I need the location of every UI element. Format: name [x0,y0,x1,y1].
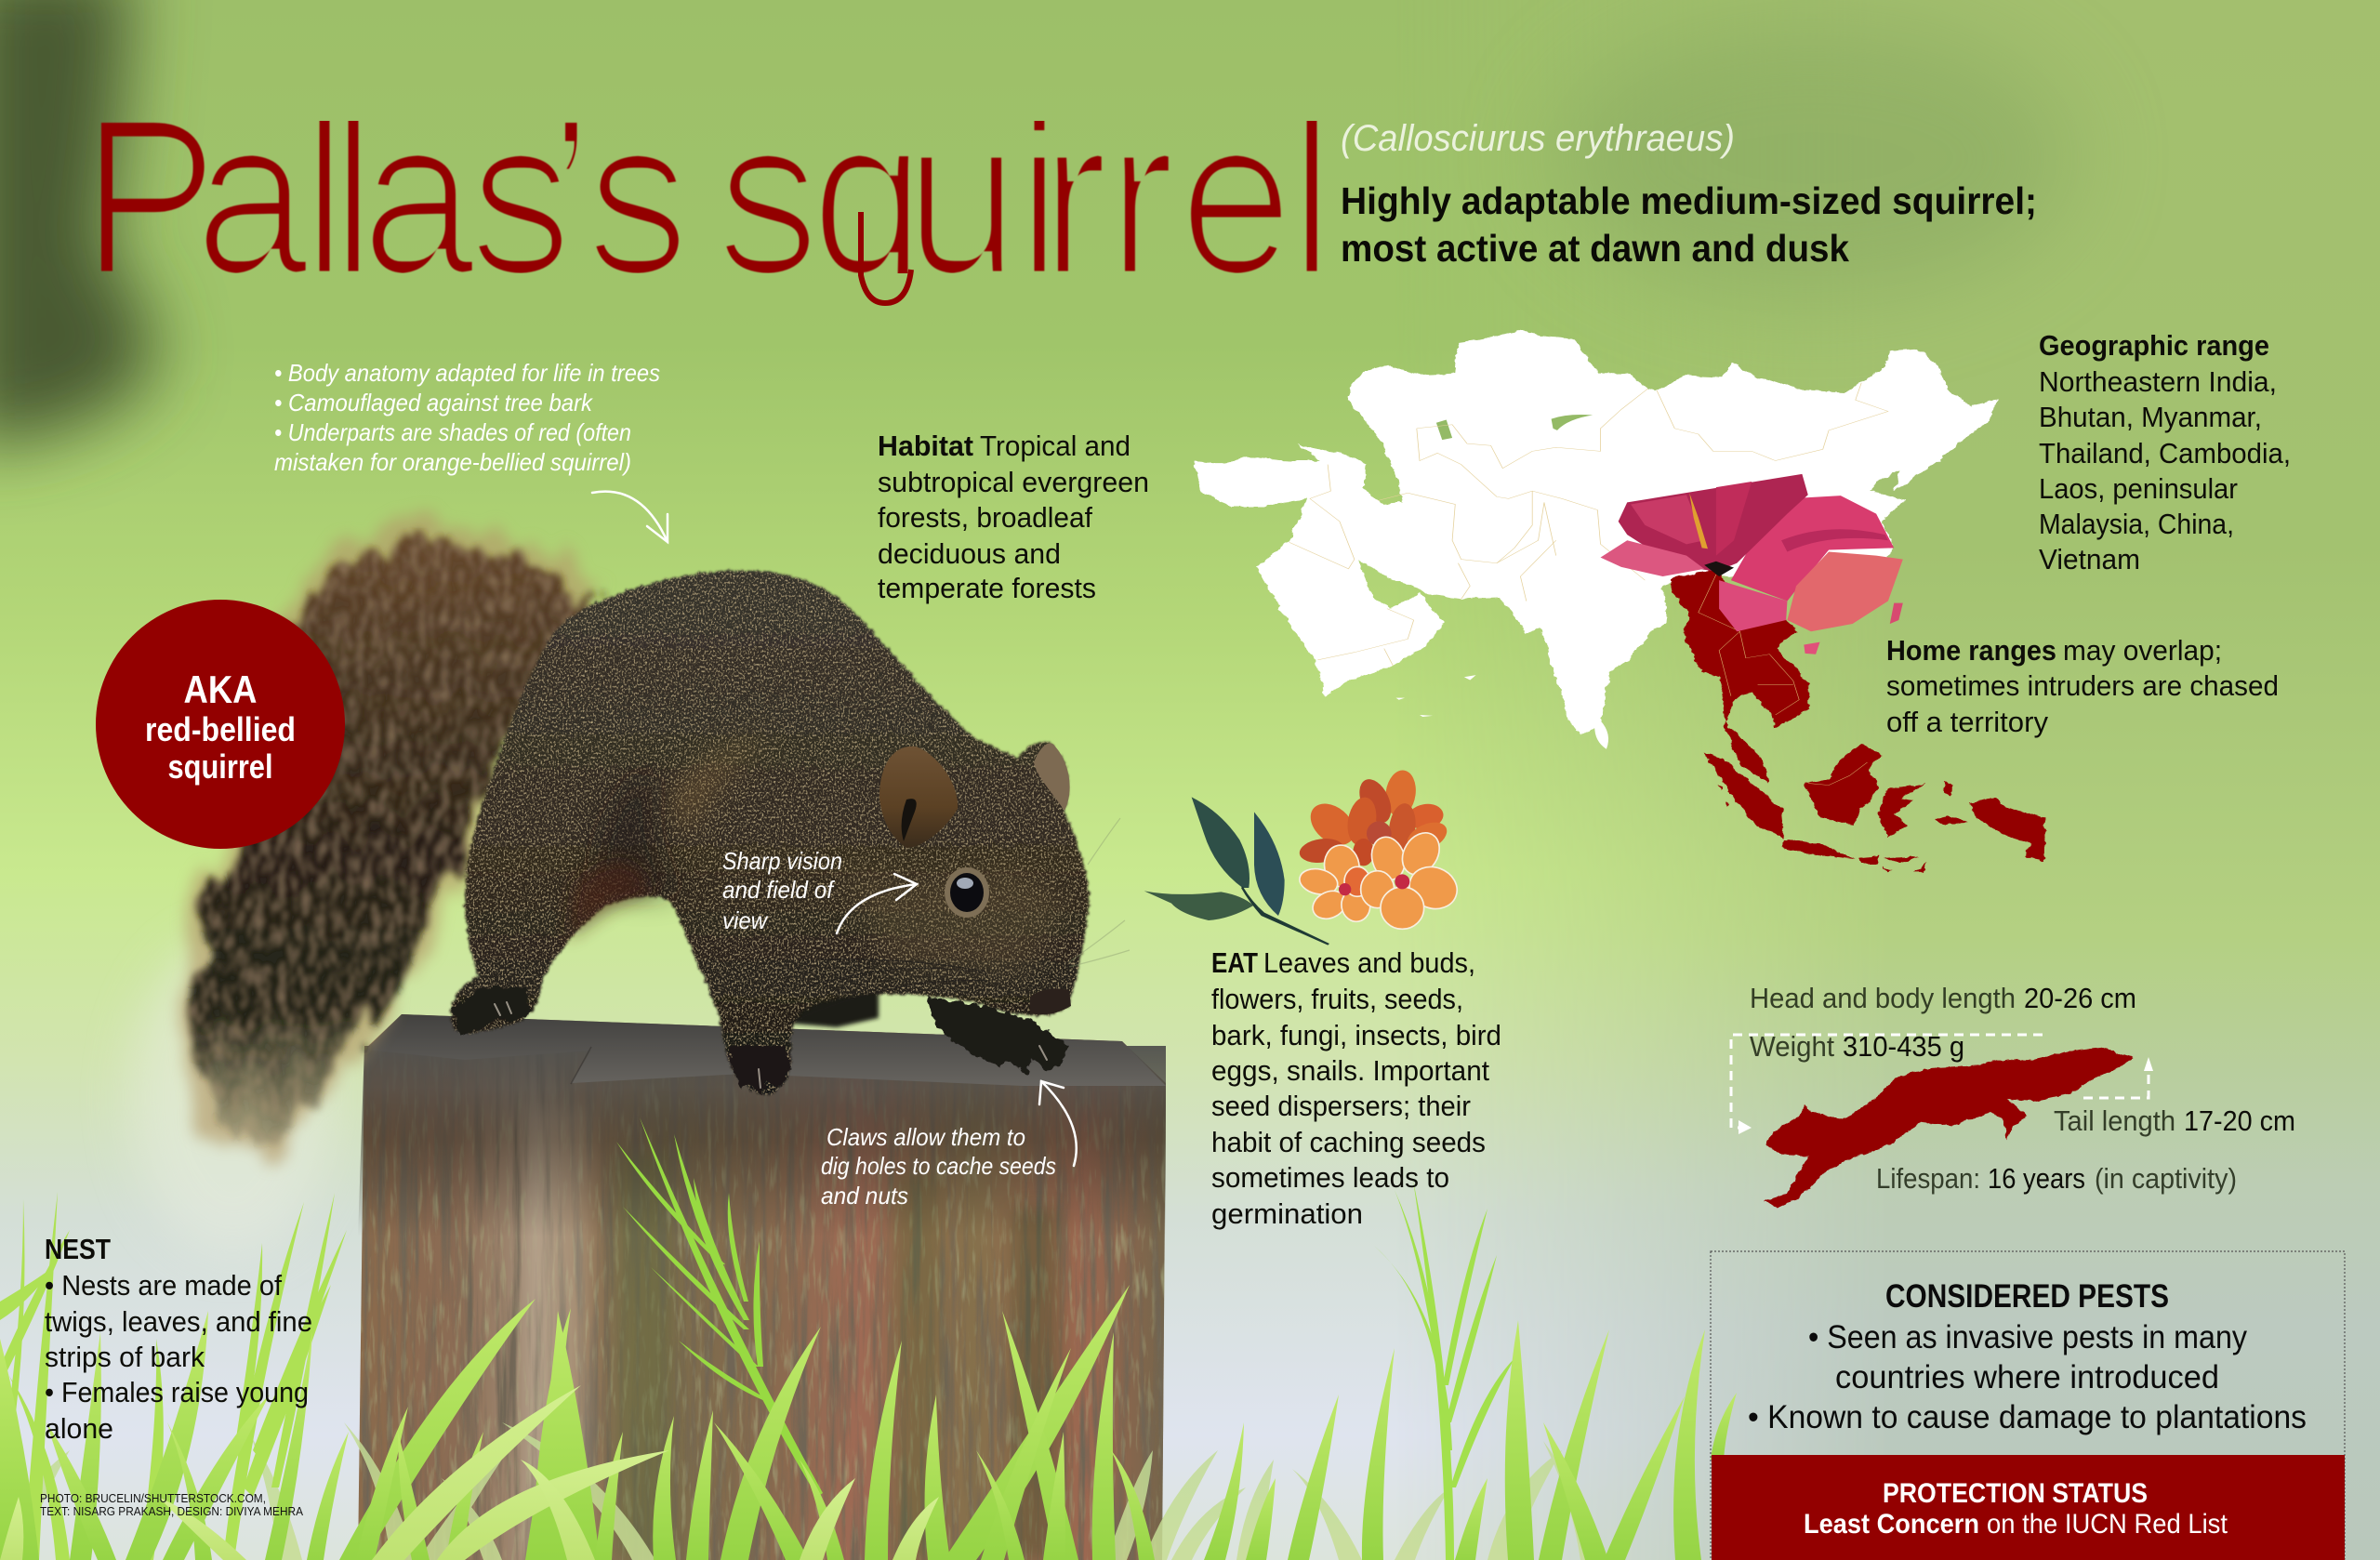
trait notes: • Underparts are shades of red (often [274,418,631,446]
icon: flowers front [1297,826,1463,929]
diet text: flowers, fruits, seeds, [1211,983,1463,1015]
hind paw [452,987,532,1034]
home ranges text: sometimes intruders are chased [1886,669,2279,702]
credits: TEXT: NISARG PRAKASH, DESIGN: DIVIYA MEHRA [40,1504,303,1518]
panel: considered pests: • Known to cause damage to plantations [1748,1399,2307,1435]
arrow: vision [837,874,917,933]
whiskers [790,818,1130,1023]
AKA badge: AKA [184,668,257,711]
tall plant centre [616,1117,823,1497]
nest text: • Females raise young [45,1376,309,1408]
near front paw [926,997,1069,1074]
vision note [722,847,842,934]
range map [1195,330,2045,872]
squirrel photo [177,519,1130,1153]
habitat text: temperate forests [878,572,1096,604]
subtitle [1341,179,2037,270]
habitat text: forests, broadleaf [878,501,1092,534]
diet text: germination [1211,1197,1363,1230]
map: red region borders [1699,575,1868,786]
home ranges text [1886,634,2279,738]
left plants [0,1192,347,1560]
diet text: EAT [1211,946,1258,979]
tall plant right [1374,1181,1515,1560]
geographic range text: Vietnam [2039,543,2140,575]
panel: considered pests: CONSIDERED PESTS [1885,1278,2169,1315]
scientific name: (Callosciurus erythraeus) [1341,118,1735,159]
credits: PHOTO: BRUCELIN/SHUTTERSTOCK.COM, [40,1491,266,1505]
measurements: Lifespan: [1876,1162,1980,1195]
diet text: habit of caching seeds [1211,1126,1486,1158]
measurements: Head and body length [1750,982,2016,1014]
measurements: 17-20 cm [2184,1104,2295,1137]
panel: protection status: on the IUCN Red List [1987,1509,2228,1540]
measurements: 16 years [1988,1162,2085,1195]
arrow: traits to squirrel [592,492,668,542]
icon: leaves and flowers [1144,768,1463,945]
claws note: dig holes to cache seeds [821,1152,1056,1180]
geographic range text: Malaysia, China, [2039,508,2234,540]
squirrel tail [177,519,604,1153]
panel: protection status [1712,1455,2345,1560]
home ranges text: Home ranges [1886,634,2056,667]
measurements: Tail length [2054,1104,2175,1137]
right blades [1204,1320,1737,1560]
habitat text: deciduous and [878,537,1061,570]
measurements: 310-435 g [1843,1030,1964,1063]
near front claws [731,1046,790,1097]
trait notes [274,359,660,476]
arrowhead body length [1739,1120,1752,1134]
map: Sri Lanka and islands [1395,675,1608,749]
trait notes: • Body anatomy adapted for life in trees [274,359,660,387]
nose [1030,989,1071,1014]
nest text [45,1233,312,1445]
title q tail [861,212,911,303]
wooden post [358,1014,1166,1560]
home ranges text: off a territory [1886,706,2049,738]
map: inland seas [1436,415,1593,440]
trait notes: • Camouflaged against tree bark [274,389,594,416]
diet text: Leaves and buds, [1263,946,1475,979]
nest text: alone [45,1412,113,1445]
grass [0,1117,1737,1560]
diet text [1211,946,1501,1230]
panel: protection status: Least Concern [1804,1509,1979,1540]
geographic range text: Thailand, Cambodia, [2039,437,2291,469]
eye [950,873,984,912]
panel: considered pests: • Seen as invasive pests in many [1808,1319,2247,1355]
vision note: Sharp vision [722,847,842,875]
nest text: strips of bark [45,1341,205,1373]
diet text: sometimes leads to [1211,1161,1449,1194]
nest text: twigs, leaves, and fine [45,1305,312,1338]
arrowhead tail length [2144,1057,2153,1071]
nest text: NEST [45,1233,111,1265]
habitat text: Habitat [878,430,973,462]
habitat text: subtropical evergreen [878,466,1149,498]
map: squirrel range in red [1669,569,2045,872]
habitat text: Tropical and [980,430,1130,462]
icon: flowers back [1298,768,1451,866]
arrow: claws [1039,1081,1077,1166]
squirrel body [451,571,1090,1095]
dashed tail length bracket [2083,1069,2149,1098]
trait notes: mistaken for orange-bellied squirrel) [274,448,631,476]
panel: considered pests [1711,1251,2345,1559]
measurements: (in captivity) [2095,1162,2237,1195]
claws note: Claws allow them to [826,1123,1025,1151]
measurements [1750,982,2295,1195]
geographic range text: Northeastern India, [2039,365,2277,398]
AKA badge [96,600,345,849]
pale foreground blades [0,1385,939,1560]
vision note: view [722,906,769,934]
diet text: eggs, snails. Important [1211,1054,1489,1087]
measurements: Weight [1750,1030,1834,1063]
map: Asia landmass [1195,330,1998,734]
subtitle: most active at dawn and dusk [1341,227,1849,270]
centre blades [339,1285,1155,1560]
diet text: seed dispersers; their [1211,1090,1471,1122]
habitat text [878,430,1149,604]
panel: considered pests: countries where introduced [1835,1359,2219,1395]
geographic range text [2039,329,2291,575]
pale back blades [0,1422,1601,1560]
home ranges text: may overlap; [2063,634,2222,667]
AKA badge: red-bellied [145,710,296,748]
title: Pallas’s squirrel [80,73,1335,319]
nest text: • Nests are made of [45,1269,282,1302]
vision note: and field of [722,876,836,904]
geographic range text: Laos, peninsular [2039,472,2238,505]
measurements: 20-26 cm [2024,982,2136,1014]
eye ring [945,867,989,918]
icon: flower centres [1339,874,1409,895]
ear right [1034,743,1070,811]
body shading [567,734,1069,976]
eye highlight [957,878,973,889]
geographic range text: Bhutan, Myanmar, [2039,401,2262,433]
map: country borders [1289,383,1888,666]
geographic range text: Geographic range [2039,329,2269,362]
squirrel silhouette [1764,1047,2133,1207]
photo backdrop haze near tail [130,939,335,1255]
claws note: and nuts [821,1182,908,1210]
hibiscus flower over China [1601,474,1903,654]
far front paw [772,976,879,1027]
icon: leaves [1144,797,1329,945]
subtitle: Highly adaptable medium-sized squirrel; [1341,179,2037,222]
claws note [821,1123,1056,1210]
diet text: bark, fungi, insects, bird [1211,1019,1501,1051]
dashed body length bracket [1731,1035,2043,1128]
AKA badge: squirrel [167,747,273,786]
credits [40,1491,303,1518]
ear left [879,747,958,848]
panel: protection status: PROTECTION STATUS [1883,1478,2148,1509]
claw highlights [495,1002,1047,1088]
